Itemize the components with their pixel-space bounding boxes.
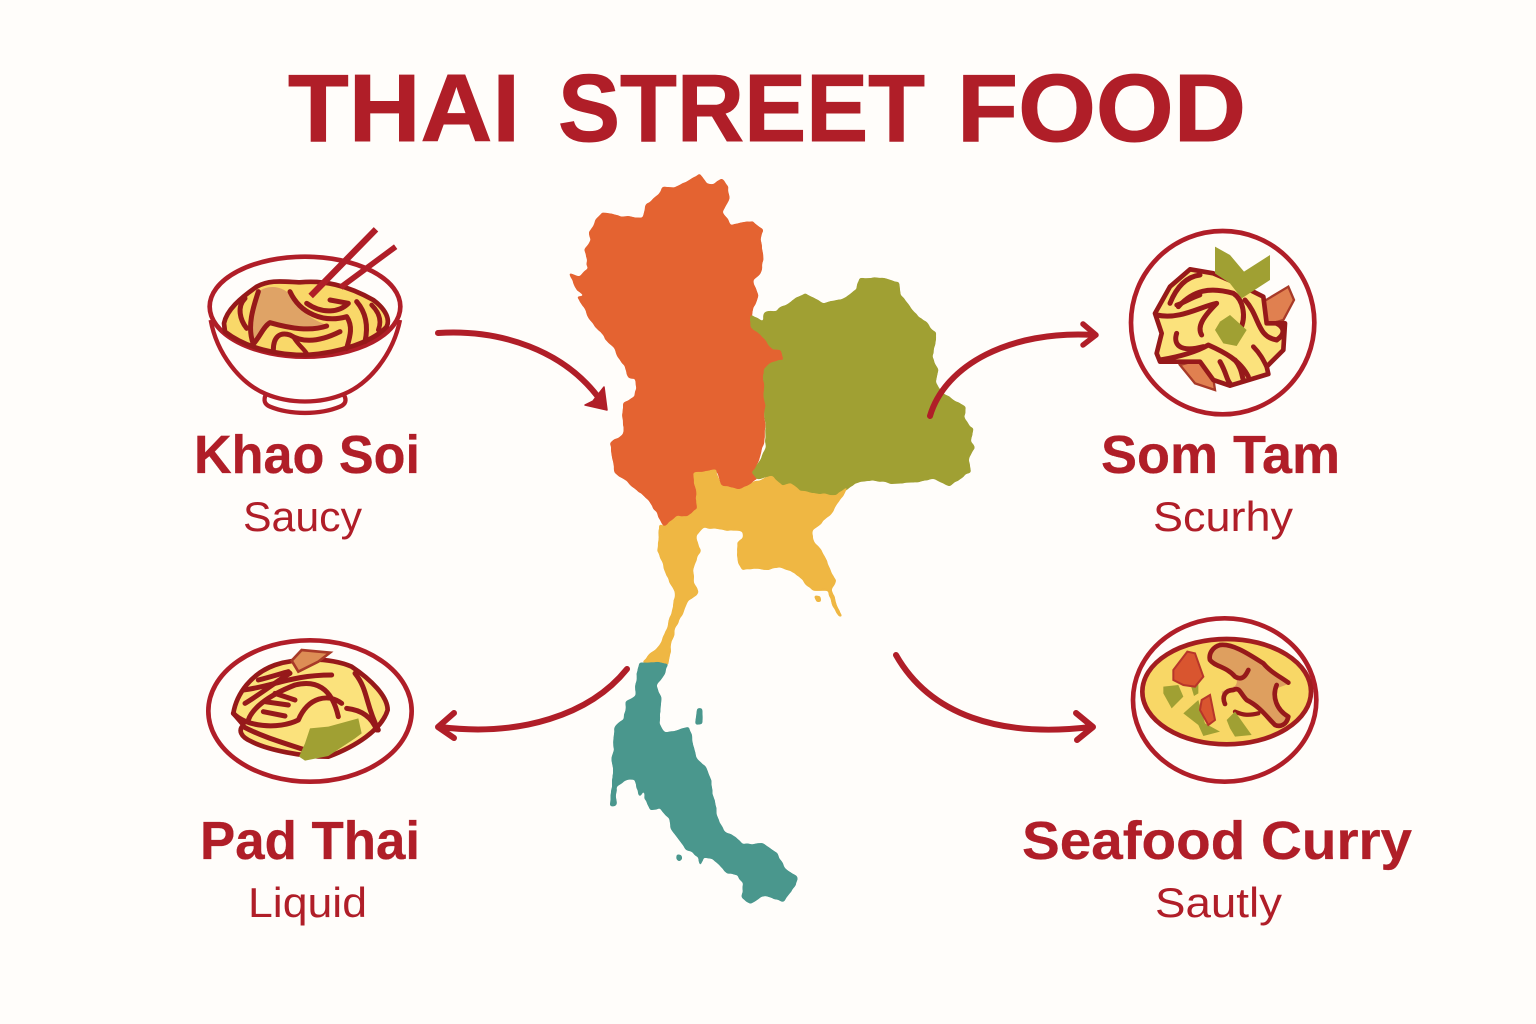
arrow: Khao Soi to north <box>438 333 607 410</box>
label: Seafood Curry <box>1022 811 1412 926</box>
label: Pad Thai: Pad Thai <box>200 811 420 871</box>
arrow: central to Seafood Curry <box>896 655 1093 740</box>
icon: Khao Soi noodle bowl <box>210 229 400 413</box>
map of Thailand <box>569 175 974 903</box>
label: Pad Thai: Liquid <box>248 879 367 926</box>
icon: Pad Thai plate <box>208 640 412 782</box>
title: STREET <box>558 55 925 162</box>
label: Som Tam: Som Tam <box>1101 425 1340 485</box>
title: FOOD <box>957 55 1246 162</box>
title: THAI <box>288 55 520 162</box>
icon: Seafood Curry bowl <box>1133 618 1316 782</box>
map region: central (yellow) <box>643 470 847 664</box>
map region: south (teal) <box>611 663 796 903</box>
title <box>288 55 1246 162</box>
label: Khao Soi: Saucy <box>243 493 362 540</box>
label: Khao Soi: Khao Soi <box>194 425 420 485</box>
label: Seafood Curry: Sautly <box>1155 879 1282 926</box>
arrow: south to Pad Thai <box>438 669 627 738</box>
label: Seafood Curry: Seafood Curry <box>1022 811 1412 871</box>
icon: Som Tam plate <box>1131 231 1314 414</box>
label: Som Tam: Scurhy <box>1153 493 1293 540</box>
label: Som Tam <box>1101 425 1340 540</box>
arrow: northeast to Som Tam <box>930 324 1096 416</box>
map region: northeast (green) <box>751 278 974 495</box>
map region: north (orange) <box>569 175 784 527</box>
label: Pad Thai <box>200 811 420 926</box>
label: Khao Soi <box>194 425 420 540</box>
